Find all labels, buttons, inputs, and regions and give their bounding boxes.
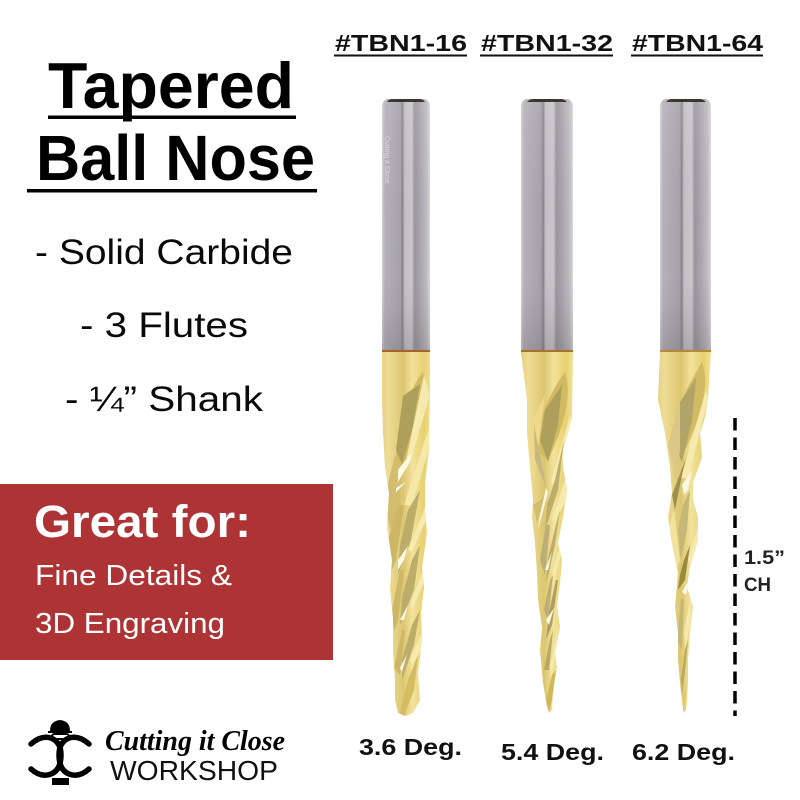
router bit: TBN1-32	[520, 99, 574, 718]
angle label: 6.2 degrees: 6.2 Deg.	[632, 739, 735, 765]
feature: solid carbide: - Solid Carbide	[35, 233, 293, 272]
logo workshop wordmark: WORKSHOP	[110, 755, 278, 786]
angle label: 3.6 degrees: 3.6 Deg.	[359, 734, 462, 760]
feature: shank: - ¼” Shank	[65, 380, 264, 419]
height marker: dashed line	[733, 418, 737, 716]
router bit: TBN1-16	[380, 99, 432, 718]
feature: flutes: - 3 Flutes	[80, 306, 248, 345]
angle label: 5.4 degrees: 5.4 Deg.	[501, 739, 604, 765]
part number: TBN1-16: #TBN1-16	[335, 30, 467, 56]
title	[27, 49, 317, 194]
use: fine details: Fine Details &	[35, 560, 232, 592]
title: Tapered	[48, 49, 294, 122]
panel heading: Great for:	[34, 496, 251, 547]
part number: TBN1-64: #TBN1-64	[632, 30, 763, 56]
part number: TBN1-32: #TBN1-32	[481, 30, 613, 56]
title: Ball Nose	[36, 122, 315, 194]
use: 3d engraving: 3D Engraving	[35, 608, 225, 640]
feature list	[35, 233, 293, 419]
icon: worker with helmet and goggles	[31, 720, 89, 785]
height label: 1.5 inch cutting height	[744, 548, 785, 596]
height label: 1.5 inch cutting height: CH	[744, 575, 771, 596]
router bit: TBN1-16: Cutting it Close	[383, 136, 390, 184]
logo: Cutting it Close Workshop	[31, 720, 285, 786]
height label: 1.5 inch cutting height: 1.5”	[744, 548, 785, 569]
logo script name: Cutting it Close	[105, 725, 285, 757]
router bit: TBN1-64	[656, 99, 712, 718]
panel: great for	[0, 484, 333, 660]
